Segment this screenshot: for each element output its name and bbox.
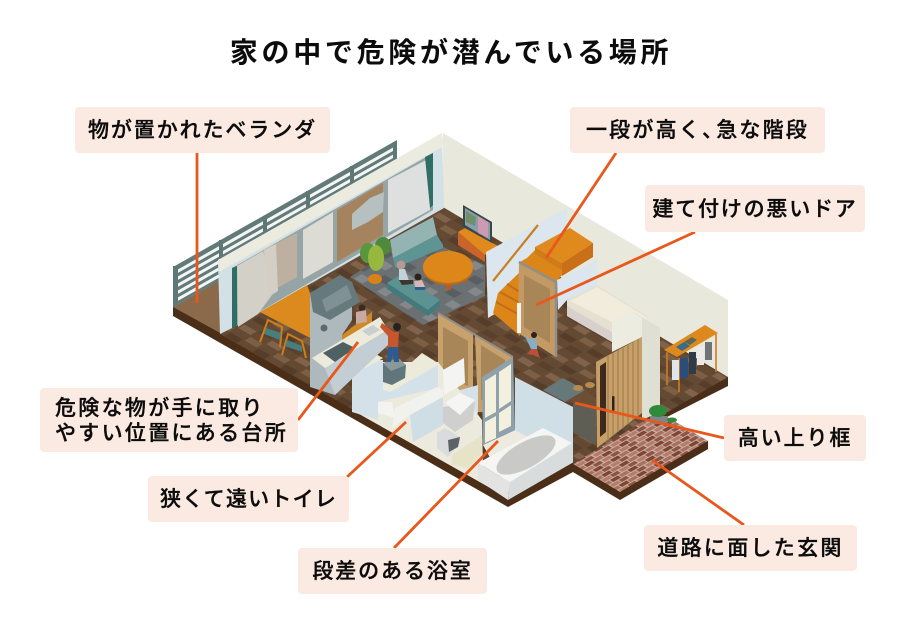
label: veranda bbox=[75, 107, 330, 153]
toilet room bbox=[352, 350, 443, 442]
label: toilet bbox=[148, 476, 349, 522]
closet bbox=[664, 325, 718, 392]
washroom wall behind vanity bbox=[443, 385, 478, 425]
label: kitchen: 危険な物が手に取り bbox=[55, 396, 265, 420]
label: entrance bbox=[644, 525, 857, 571]
potted plant bbox=[649, 405, 677, 424]
windows bbox=[232, 153, 433, 328]
tv and bench bbox=[458, 205, 498, 262]
laundry basket bbox=[452, 435, 482, 468]
kitchen bbox=[310, 275, 388, 395]
ottoman bbox=[387, 275, 440, 316]
trash bin bbox=[383, 358, 406, 385]
dining table and chairs bbox=[260, 285, 310, 358]
title: 家の中で危険が潜んでいる場所 bbox=[230, 37, 672, 68]
washing machine bbox=[437, 428, 460, 457]
label: door bbox=[645, 185, 865, 232]
washroom doors bbox=[438, 313, 513, 412]
label: bathroom: 段差のある浴室 bbox=[312, 560, 473, 583]
back sofa bbox=[390, 217, 443, 268]
label: kitchen: やすい位置にある台所 bbox=[55, 422, 288, 444]
veranda railing and floor bbox=[173, 140, 397, 334]
toilet and washroom base bbox=[352, 362, 508, 498]
label: entrance step bbox=[724, 415, 866, 461]
floor slab bbox=[173, 207, 728, 507]
window wall bbox=[218, 133, 444, 334]
label: kitchen bbox=[40, 388, 298, 452]
label: veranda: 物が置かれたベランダ bbox=[88, 119, 317, 142]
label: toilet: 狭くて遠いトイレ bbox=[160, 488, 337, 511]
plant bbox=[360, 237, 391, 284]
child near door bbox=[524, 332, 540, 358]
stair wall bbox=[486, 208, 568, 318]
man in kitchen bbox=[380, 323, 401, 362]
leader lines bbox=[197, 153, 744, 548]
label: entrance: 道路に面した玄関 bbox=[657, 537, 844, 560]
seated family bbox=[396, 260, 425, 290]
entrance door bbox=[596, 337, 642, 448]
entrance brick bbox=[573, 417, 708, 499]
stair door bbox=[517, 262, 556, 357]
rug bbox=[350, 243, 485, 325]
label: entrance step: 高い上り框 bbox=[738, 427, 852, 450]
bathroom bbox=[478, 377, 573, 500]
label: stairs bbox=[570, 107, 825, 153]
partition wall block bbox=[612, 310, 660, 420]
label: bathroom bbox=[298, 548, 487, 594]
back right wall bbox=[443, 133, 728, 377]
label: door: 建て付けの悪いドア bbox=[652, 198, 858, 220]
label: stairs: 一段が高く 急な階段 bbox=[586, 119, 809, 142]
label: stairs: 、 bbox=[702, 119, 725, 142]
stairs bbox=[493, 228, 593, 336]
entrance step bbox=[543, 378, 596, 445]
bathroom door bbox=[482, 357, 515, 445]
vanity and mirror bbox=[443, 358, 475, 432]
low table bbox=[423, 251, 473, 290]
isometric house illustration bbox=[173, 133, 745, 548]
under-stair panel and bed bbox=[557, 260, 650, 342]
